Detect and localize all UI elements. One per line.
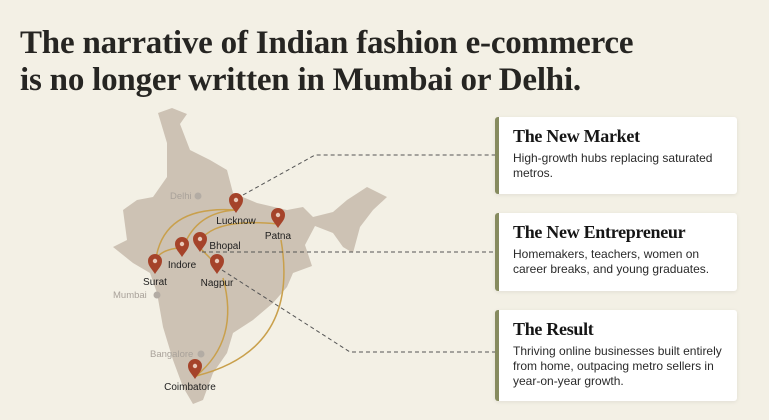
card: new market: The New Market xyxy=(513,126,640,146)
city labels: Nagpur xyxy=(201,278,234,289)
city labels: Bhopal xyxy=(209,241,241,252)
card: new entrepreneur: The New Entrepreneur xyxy=(513,222,685,242)
city labels: Surat xyxy=(143,277,167,288)
title: is no longer written in Mumbai or Delhi. xyxy=(20,62,581,98)
grey metros: Mumbai xyxy=(113,290,147,301)
card: result xyxy=(495,310,737,401)
grey metros: Delhi xyxy=(170,191,192,202)
card: new entrepreneur xyxy=(495,213,737,291)
card: new entrepreneur: Homemakers, teachers, women on career breaks, and young graduates. xyxy=(513,247,709,276)
city labels: Patna xyxy=(265,231,292,242)
arcs xyxy=(156,210,284,376)
dashed connectors xyxy=(202,155,495,352)
India outline xyxy=(113,108,387,404)
city labels: Lucknow xyxy=(216,216,257,227)
card: result: Thriving online businesses built entirely from home, outpacing metro sellers in year-on-year growth. xyxy=(513,344,722,388)
city labels: Indore xyxy=(168,260,197,271)
card: result: The Result xyxy=(513,319,594,339)
grey metros: Bangalore xyxy=(150,349,193,360)
card: new market xyxy=(495,117,737,194)
city labels xyxy=(143,216,292,393)
title xyxy=(20,25,633,98)
grey metros xyxy=(113,191,204,360)
pins xyxy=(148,193,285,379)
city labels: Coimbatore xyxy=(164,382,216,393)
title: The narrative of Indian fashion e-commerce xyxy=(20,25,633,61)
card: new market: High-growth hubs replacing saturated metros. xyxy=(513,151,712,180)
